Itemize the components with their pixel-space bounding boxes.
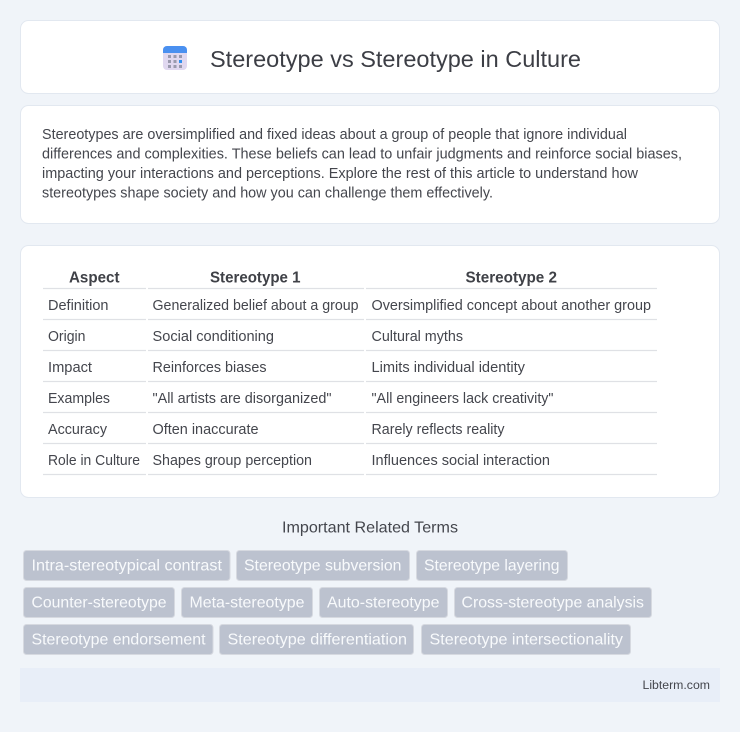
row: origin: Origin (48, 329, 86, 345)
related terms tags: Stereotype layering (424, 558, 560, 575)
intro paragraph: differences and complexities. These beliefs can lead to unfair judgments and reinforce social biases, (42, 146, 682, 162)
row: origin (48, 329, 463, 345)
related terms tags: Stereotype differentiation (228, 632, 407, 649)
related terms tags: Stereotype intersectionality (430, 632, 623, 649)
row: examples: "All artists are disorganized" (152, 391, 332, 407)
related terms tags: Stereotype subversion (244, 558, 402, 575)
table header: Stereotype 1 (210, 270, 301, 286)
intro paragraph (42, 127, 682, 202)
row: definition: Oversimplified concept about another group (372, 298, 651, 314)
row: definition: Generalized belief about a group (152, 298, 358, 314)
row: definition (48, 298, 651, 314)
row: impact (48, 360, 526, 376)
row: impact: Impact (48, 360, 92, 376)
heading: important related terms: Important Related Terms (282, 520, 458, 536)
row: examples (48, 391, 554, 407)
row: impact: Reinforces biases (152, 360, 266, 376)
related terms tags: Meta-stereotype (190, 595, 304, 612)
row: impact: Limits individual identity (372, 360, 526, 376)
row: accuracy: Accuracy (48, 422, 108, 438)
related terms tags (24, 550, 652, 654)
row: role in culture: Shapes group perception (152, 453, 312, 469)
header panel (20, 20, 720, 94)
intro paragraph: Stereotypes are oversimplified and fixed ideas about a group of people that ignore individual (42, 127, 627, 143)
row: accuracy: Rarely reflects reality (372, 422, 505, 438)
row: accuracy (48, 422, 505, 438)
table header: Aspect (69, 270, 120, 286)
intro paragraph: stereotypes shape society and how you can challenge them effectively. (42, 186, 493, 202)
row: origin: Cultural myths (372, 329, 463, 345)
row: role in culture: Role in Culture (48, 453, 140, 469)
panel: introduction (20, 106, 720, 224)
row: definition: Definition (48, 298, 108, 314)
row: role in culture: Influences social interaction (372, 453, 550, 469)
footer (20, 668, 720, 702)
table header (69, 270, 557, 286)
row: role in culture (48, 453, 550, 469)
related terms tags: Auto-stereotype (327, 595, 440, 612)
footer credit: Libterm.com (642, 678, 710, 692)
row: examples: "All engineers lack creativity" (372, 391, 554, 407)
row: examples: Examples (48, 391, 110, 407)
title: Stereotype vs Stereotype in Culture (210, 46, 581, 72)
related terms tags: Intra-stereotypical contrast (32, 558, 223, 575)
panel: comparison table (20, 246, 720, 498)
related terms tags: Counter-stereotype (32, 595, 166, 612)
row: origin: Social conditioning (152, 329, 274, 345)
table header: Stereotype 2 (466, 270, 557, 286)
related terms tags: Stereotype endorsement (32, 632, 206, 649)
related terms tags: Cross-stereotype analysis (462, 595, 644, 612)
intro paragraph: impacting your interactions and perceptions. Explore the rest of this article to understand how (42, 166, 639, 182)
row: accuracy: Often inaccurate (152, 422, 258, 438)
icon: calendar (163, 46, 187, 70)
